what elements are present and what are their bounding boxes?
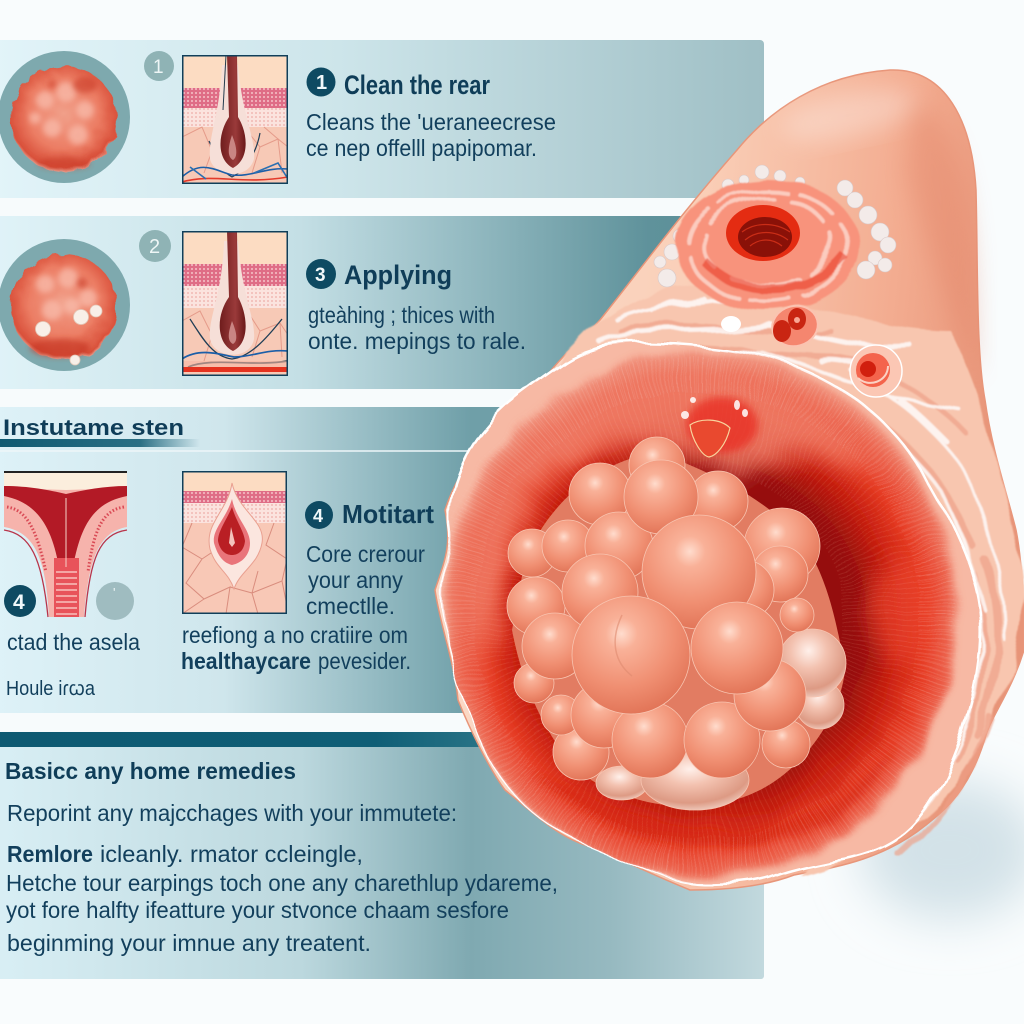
panel: instructions section bbox=[0, 407, 500, 713]
small number badge 1 bbox=[144, 51, 174, 81]
panel: step one bbox=[0, 40, 764, 198]
white separator stripes bbox=[0, 198, 764, 732]
grey badge bbox=[96, 582, 134, 620]
red glow right bbox=[870, 555, 930, 665]
small double lesion bbox=[768, 301, 822, 351]
soft shadow under the organ bbox=[860, 780, 1024, 920]
heading: clean the rear: Clean the rear bbox=[344, 70, 490, 100]
text: report changes: Reporint any majcchages with your immutete: bbox=[7, 800, 457, 826]
warty growth bbox=[507, 437, 846, 810]
text: ctad the asela: ctad the asela bbox=[7, 629, 140, 655]
diagram: follicle cross-section 2 bbox=[182, 231, 288, 376]
text: houle: Houle iɾꞷa bbox=[6, 678, 96, 700]
text: step four description: Core crerour bbox=[306, 541, 425, 567]
white spots bbox=[36, 305, 102, 365]
number badge four right: 4 bbox=[313, 506, 323, 526]
crater rings bbox=[675, 179, 859, 311]
heading: motitart: Motitart bbox=[342, 499, 434, 529]
icon: lesion with white spots in circle bbox=[0, 239, 130, 371]
small number badge 1: 1 bbox=[153, 57, 164, 78]
lesion with pale rim bbox=[440, 343, 980, 884]
cleft on central bump bbox=[615, 615, 632, 676]
text: healthcare provider note: healthaycare bbox=[181, 648, 311, 674]
number badge one bbox=[306, 68, 336, 96]
divider bbox=[0, 450, 764, 452]
icon: lesion in circle bbox=[0, 51, 130, 183]
red spot with drop bbox=[681, 397, 758, 457]
number badge four right bbox=[305, 501, 333, 529]
text: step two description: gteàhing ; thices with bbox=[308, 302, 495, 328]
section underline bbox=[0, 439, 200, 447]
top crater lesion bbox=[654, 165, 896, 311]
organ illustration bbox=[435, 70, 1024, 890]
number badge three: 3 bbox=[315, 265, 326, 286]
panel: home remedies bbox=[0, 747, 764, 979]
diagram: funnel cross-section bbox=[4, 471, 127, 617]
dark divider bar bbox=[0, 732, 500, 747]
organ body bbox=[435, 70, 1024, 890]
text: remedies paragraph: Hetche tour earpings toch one any charethlup ydareme, bbox=[6, 870, 558, 896]
small number badge 2: 2 bbox=[149, 236, 160, 258]
text: remedies paragraph: icleanly. rmator ccleingle, bbox=[100, 841, 363, 867]
growth base bbox=[512, 452, 845, 806]
text: remedies paragraph: yot fore halfty ifeatture your stvonce chaam sesfore bbox=[6, 897, 509, 923]
lesion red area bbox=[444, 353, 956, 877]
text: healthcare provider note: pevesider. bbox=[318, 648, 411, 674]
radial fibres bbox=[492, 410, 902, 820]
grey badge: ' bbox=[113, 585, 115, 600]
text: step two description: onte. mepings to rale. bbox=[308, 328, 526, 354]
text: step four description: your anny bbox=[308, 567, 403, 593]
bottom red band bbox=[539, 752, 894, 848]
heading: applying: Applying bbox=[344, 260, 452, 290]
small number badge 2 bbox=[139, 230, 171, 262]
panel: step two bbox=[0, 216, 681, 389]
number badge four left: 4 bbox=[13, 591, 25, 614]
text: healthcare provider note: reefiong a no cratiire om bbox=[182, 622, 408, 648]
small round lesion bbox=[850, 345, 902, 397]
white crust bbox=[654, 165, 896, 287]
number badge four left bbox=[4, 585, 36, 617]
diagram: skin lesion cross-section bbox=[182, 471, 287, 614]
highlight on the organ top bbox=[777, 79, 923, 151]
text: step four description: cmectlle. bbox=[306, 593, 395, 619]
wrinkled pale skin bbox=[545, 286, 1022, 875]
white blister bbox=[721, 316, 741, 332]
diagram: follicle cross-section 1 bbox=[182, 55, 288, 184]
shaded side of the organ bbox=[905, 100, 976, 380]
text: step one description: ce nep offelll papipomar. bbox=[306, 135, 537, 161]
salmon upper wash bbox=[462, 372, 880, 680]
heading: instutame sten: Instutame sten bbox=[3, 415, 184, 440]
heading: basic home remedies: Basicc any home remedies bbox=[5, 758, 296, 784]
number badge three bbox=[306, 259, 336, 289]
text: remedies paragraph: Remlore bbox=[7, 841, 93, 867]
text: step one description: Cleans the 'ueraneecrese bbox=[306, 109, 556, 135]
number badge one: 1 bbox=[316, 72, 327, 94]
text: remedies paragraph: beginming your imnue any treatent. bbox=[7, 930, 371, 956]
